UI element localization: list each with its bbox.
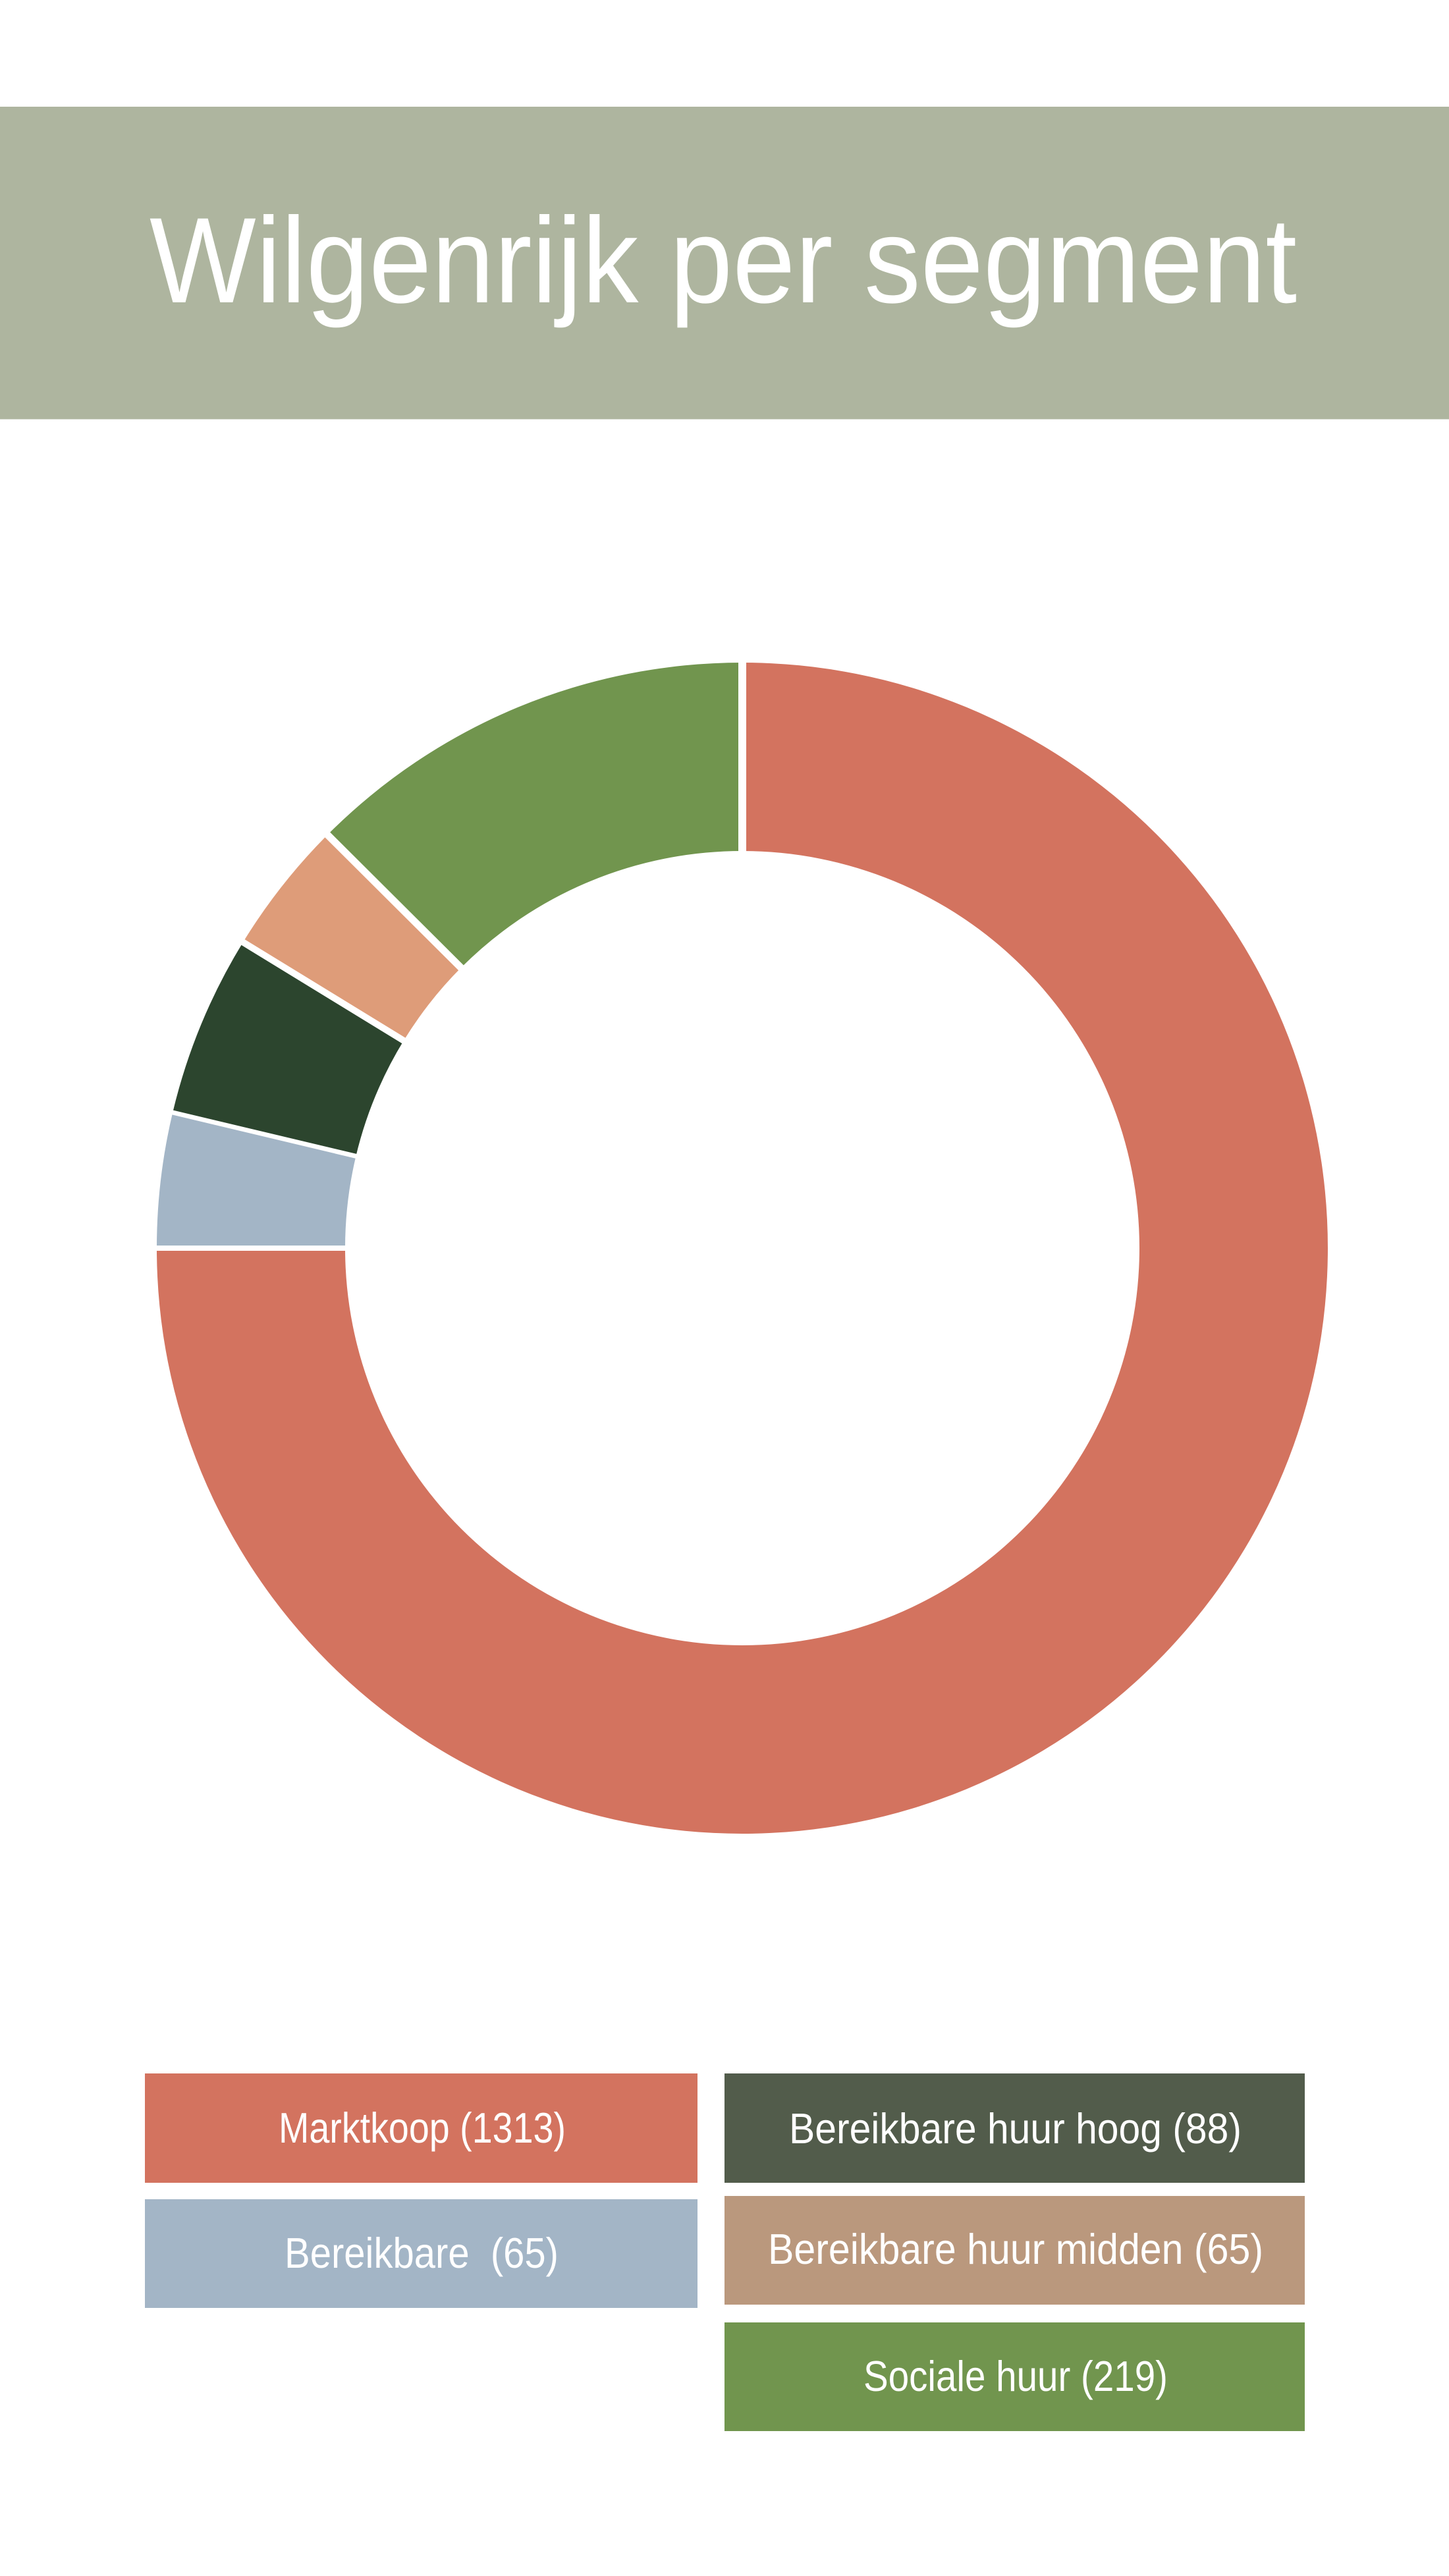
header banner	[0, 107, 1449, 419]
legend item: Bereikbare: Bereikbare (65)	[285, 2229, 559, 2277]
segment: Bereikbare huur midden 65	[243, 835, 461, 1041]
legend item: Bereikbare huur midden: Bereikbare huur midden (65)	[768, 2225, 1263, 2273]
legend item: Bereikbare huur hoog	[724, 2073, 1305, 2183]
segment: Bereikbare huur hoog 88	[173, 942, 404, 1156]
title: Wilgenrijk per segment	[150, 193, 1297, 329]
legend item: Bereikbare	[145, 2199, 697, 2308]
donut chart	[153, 659, 1328, 1834]
legend item: Sociale huur: Sociale huur (219)	[863, 2352, 1168, 2400]
legend item: Bereikbare huur midden	[724, 2196, 1305, 2305]
legend item: Marktkoop	[145, 2073, 697, 2183]
segment: Marktkoop 1313	[157, 663, 1328, 1834]
segment: Bereikbare 65	[157, 1112, 356, 1248]
legend item: Marktkoop: Marktkoop (1313)	[279, 2104, 566, 2152]
segment: Sociale huur 219	[327, 663, 742, 968]
legend	[145, 2073, 1305, 2431]
legend item: Sociale huur	[724, 2322, 1305, 2431]
legend item: Bereikbare huur hoog: Bereikbare huur hoog (88)	[789, 2104, 1242, 2152]
